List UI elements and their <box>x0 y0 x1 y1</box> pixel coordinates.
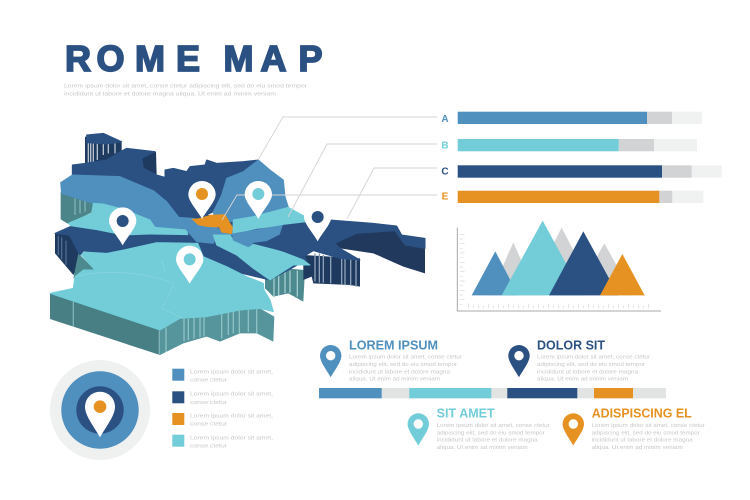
map inner borders <box>75 260 183 318</box>
bar A: A <box>441 114 449 125</box>
legend item: navy: conse ctetur <box>190 400 227 406</box>
block: dolor sit: aliqua. Ut enim ad minim veniam <box>537 376 628 382</box>
map region: south teal <box>50 240 273 330</box>
icon: teal pin <box>408 413 429 446</box>
block: adispiscing el: incididunt ut labore et dolore magna <box>592 438 693 444</box>
bar chart <box>441 112 722 203</box>
block: adispiscing el: ADISPISCING EL <box>592 406 692 420</box>
map pins <box>109 181 331 284</box>
map region: west teal <box>68 203 188 237</box>
map region: north tower <box>87 133 122 144</box>
pin: navy left <box>109 207 136 245</box>
block: dolor sit: Lorem ipsum dolor sit amet, conse ctetur <box>537 355 650 361</box>
legend item: orange: conse ctetur <box>190 422 227 428</box>
map region: north navy <box>72 148 258 220</box>
navy peak <box>549 231 618 295</box>
map region: central blue <box>178 217 233 243</box>
icon: orange pin <box>563 413 584 446</box>
legend <box>172 369 273 449</box>
bar B <box>441 139 697 152</box>
blue peak <box>472 251 518 295</box>
gray peaks <box>490 228 633 295</box>
block: dolor sit: adipiscing elit, sed do eiu smod tempor <box>537 362 645 368</box>
block: adispiscing el: aliqua. Ut enim ad minim veniam <box>592 445 683 451</box>
pin: teal lower <box>176 246 203 284</box>
teal peak <box>502 221 583 295</box>
bar C: C <box>441 166 449 178</box>
block: dolor sit: incididunt ut labore et dolore magna <box>537 369 638 375</box>
block: sit amet <box>408 406 550 451</box>
icon: navy pin <box>508 345 530 377</box>
legend item: teal <box>172 435 273 449</box>
intro text: incididunt ut labore et dolore magna aliqua. Ut enim ad minim veniam <box>64 92 276 98</box>
segmented bar <box>319 388 666 398</box>
block: lorem ipsum: aliqua. Ut enim ad minim veniam <box>349 376 440 382</box>
bar A <box>441 112 702 125</box>
intro text <box>64 84 307 98</box>
legend item: navy <box>172 391 273 406</box>
chart axes <box>457 228 661 311</box>
map region: Rome orange <box>192 214 233 234</box>
block: sit amet: aliqua. Ut enim ad minim veniam <box>437 445 528 451</box>
legend item: blue: conse ctetur <box>190 377 227 383</box>
pin: teal upper <box>245 181 272 219</box>
map region: west blue <box>61 175 187 232</box>
triangle chart <box>457 221 661 311</box>
icon: blue pin <box>320 345 341 377</box>
connector lines <box>222 117 437 220</box>
block: lorem ipsum <box>320 338 462 382</box>
side wall stripes <box>58 141 356 354</box>
map region: lower east blue <box>233 225 283 247</box>
orange peak <box>600 254 645 295</box>
backing for central area <box>173 213 307 280</box>
bar E: E <box>442 192 449 202</box>
map region: east teal <box>233 207 307 234</box>
bar B: B <box>441 140 449 152</box>
pin: orange <box>188 181 216 219</box>
block: dolor sit <box>508 338 650 382</box>
map region: west navy <box>55 227 200 255</box>
legend item: blue <box>172 369 273 383</box>
map region: east blue <box>213 160 288 222</box>
block: lorem ipsum: incididunt ut labore et dolore magna <box>349 369 450 375</box>
block: lorem ipsum: LOREM IPSUM <box>349 338 438 352</box>
block: adispiscing el: adipiscing elit, sed do eiu smod tempor <box>592 430 700 436</box>
block: adispiscing el <box>563 406 705 451</box>
legend item: orange: Lorem ipsum dolor sit amet, <box>190 414 273 420</box>
block: lorem ipsum: adipiscing elit, sed do eiu smod tempor <box>349 362 457 368</box>
intro text: Lorem ipsum dolor sit amet, conse ctetur adipiscing elit, sed do eiu smod tempor <box>64 84 307 90</box>
map region: east navy <box>253 220 425 260</box>
pin: navy right <box>304 203 331 241</box>
locator emblem <box>50 360 150 460</box>
map region: southeast teal <box>213 235 310 280</box>
block: sit amet: Lorem ipsum dolor sit amet, conse ctetur <box>437 423 550 429</box>
block: sit amet: adipiscing elit, sed do eiu smod tempor <box>437 430 545 436</box>
map side walls <box>50 137 425 355</box>
bar E <box>442 191 703 203</box>
map <box>50 133 425 355</box>
bar C <box>441 165 722 178</box>
title: ROME MAP <box>65 38 323 79</box>
block: lorem ipsum: Lorem ipsum dolor sit amet, conse ctetur <box>349 355 462 361</box>
legend item: blue: Lorem ipsum dolor sit amet, <box>190 369 273 375</box>
legend item: navy: Lorem ipsum dolor sit amet, <box>190 392 273 398</box>
block: dolor sit: DOLOR SIT <box>537 338 605 352</box>
block: adispiscing el: Lorem ipsum dolor sit amet, conse ctetur <box>592 423 705 429</box>
block: sit amet: incididunt ut labore et dolore magna <box>437 438 538 444</box>
block: sit amet: SIT AMET <box>437 406 495 420</box>
legend item: orange <box>172 413 273 428</box>
legend item: teal: conse ctetur <box>190 443 227 449</box>
legend item: teal: Lorem ipsum dolor sit amet, <box>190 435 273 441</box>
map regions <box>50 133 425 330</box>
